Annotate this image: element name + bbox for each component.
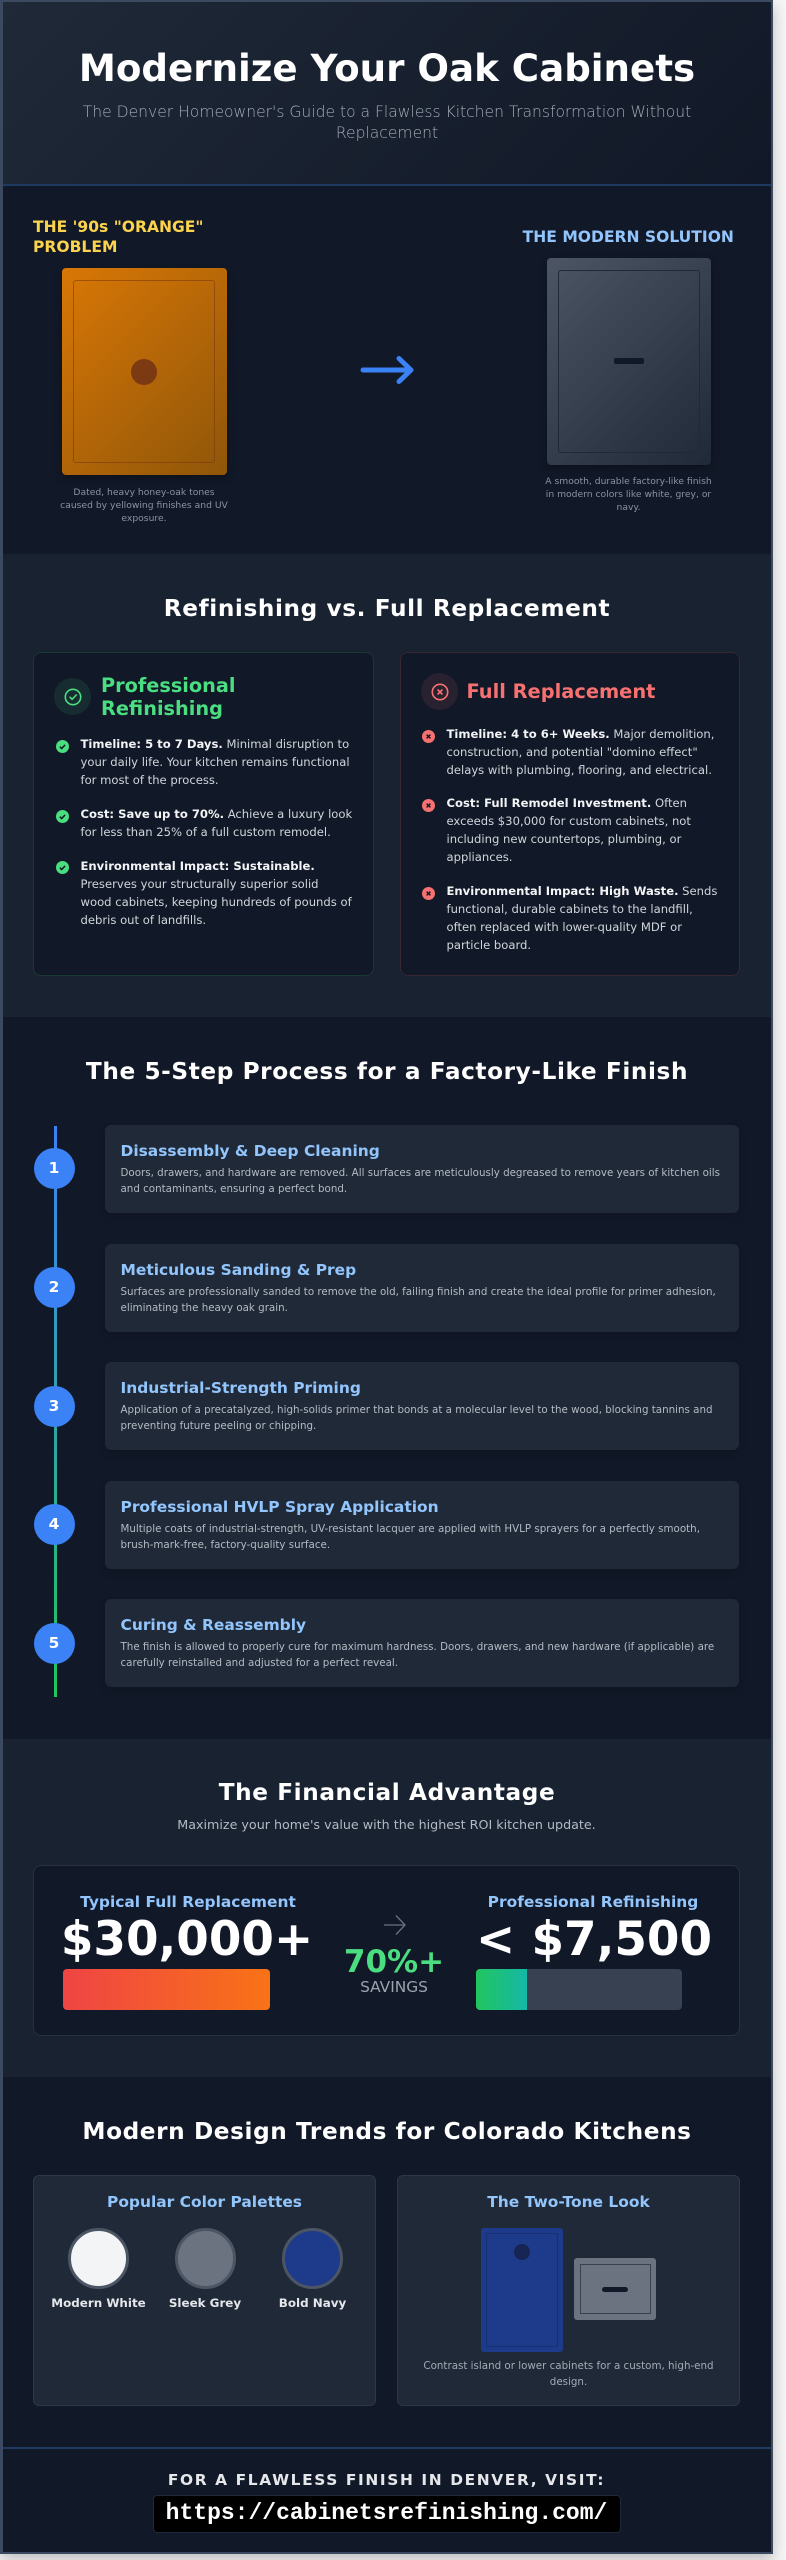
step 5 card <box>105 1599 739 1687</box>
problem caption: Dated, heavy honey-oak tones <box>73 487 215 498</box>
website url <box>152 2495 620 2533</box>
step 5 card: Curing & Reassembly <box>120 1616 306 1634</box>
refinishing heading: Professional <box>101 674 236 697</box>
cost text: appliances. <box>446 850 512 864</box>
icon: modern cabinet door <box>546 258 711 465</box>
swatch: grey <box>174 2228 236 2289</box>
step 1 number: 1 <box>49 1159 59 1177</box>
subtitle: Replacement <box>336 124 438 142</box>
cost text: Cost: Full Remodel Investment. Often <box>446 796 687 810</box>
solution caption: A smooth, durable factory-like finish <box>545 476 712 487</box>
step 2 number <box>34 1267 74 1308</box>
step 5 card: carefully reinstalled and adjusted for a perfect reveal. <box>120 1656 398 1668</box>
replacement bar <box>63 1969 270 2010</box>
step 1 card <box>105 1125 739 1213</box>
financial subtitle: Maximize your home's value with the highest ROI kitchen update. <box>177 1817 596 1832</box>
timeline text: Timeline: 5 to 7 Days. Minimal disruption to <box>80 737 349 751</box>
step 2 card <box>105 1244 739 1332</box>
environmental text: particle board. <box>446 938 531 952</box>
step 3 card <box>105 1362 739 1450</box>
cost comparison card <box>33 1865 740 2036</box>
environmental text: Environmental Impact: Sustainable. <box>80 859 315 873</box>
step 3 number: 3 <box>49 1397 59 1415</box>
panel: full replacement <box>400 652 740 976</box>
icon: x circle <box>421 673 458 710</box>
icon: bullet x <box>422 799 435 812</box>
solution caption <box>545 476 712 513</box>
icon: grey drawer <box>574 2258 656 2320</box>
swatch: white <box>68 2228 129 2289</box>
step 5 number: 5 <box>49 1634 59 1652</box>
environmental text <box>446 884 717 952</box>
step 4 card <box>105 1481 739 1569</box>
replacement label: Typical Full Replacement <box>80 1893 296 1911</box>
solution caption: in modern colors like white, grey, or <box>546 489 711 500</box>
panel: professional refinishing <box>33 652 374 976</box>
refinishing label: Professional Refinishing <box>488 1893 698 1911</box>
panel: design trends <box>3 2077 771 2448</box>
step 5 number <box>34 1623 74 1664</box>
step 4 number: 4 <box>49 1515 59 1533</box>
timeline text <box>446 727 714 777</box>
palettes heading: Popular Color Palettes <box>107 2193 302 2211</box>
cost text: Cost: Save up to 70%. Achieve a luxury look <box>80 807 352 821</box>
website url: https://cabinetsrefinishing.com/ <box>166 2500 607 2526</box>
step 3 card: preventing future peeling or chipping. <box>120 1420 316 1432</box>
step 4 card: brush-mark-free, factory-quality surface. <box>120 1538 330 1550</box>
environmental text: wood cabinets, keeping hundreds of pounds of <box>80 895 352 909</box>
title: Modernize Your Oak Cabinets <box>79 46 695 90</box>
subtitle <box>83 103 691 142</box>
step 4 card: Professional HVLP Spray Application <box>120 1498 439 1516</box>
swatch label: Bold Navy <box>279 2296 346 2310</box>
step 1 card: Doors, drawers, and hardware are removed. All surfaces are meticulously degreased to remove years of kitchen oils <box>120 1167 720 1179</box>
comparison heading: Refinishing vs. Full Replacement <box>164 594 610 622</box>
header panel <box>3 2 771 186</box>
step 1 number <box>34 1148 74 1189</box>
panel: financial advantage <box>3 1739 771 2077</box>
icon: bullet check <box>56 740 69 753</box>
step 3 card: Application of a precatalyzed, high-solids primer that bonds at a molecular level to the wood, blocking tannins and <box>120 1404 713 1416</box>
step 2 card: Meticulous Sanding & Prep <box>120 1261 356 1279</box>
environmental text: Environmental Impact: High Waste. Sends <box>446 884 717 898</box>
cost text: for less than 25% of a full custom remodel. <box>80 825 331 839</box>
step 2 card: Surfaces are professionally sanded to remove the old, failing finish and create the ideal profile for primer adhesion, <box>120 1286 716 1298</box>
refinishing bar <box>476 1969 682 2010</box>
panel: refinishing vs replacement <box>3 554 771 1017</box>
cost text <box>446 796 691 864</box>
step 1 card: and contaminants, ensuring a perfect bond. <box>120 1182 347 1194</box>
refinishing heading: Refinishing <box>101 697 223 720</box>
subtitle: The Denver Homeowner's Guide to a Flawless Kitchen Transformation Without <box>83 103 691 121</box>
footer panel <box>3 2447 771 2552</box>
timeline text: your daily life. Your kitchen remains functional <box>80 755 350 769</box>
step 3 card: Industrial-Strength Priming <box>120 1379 361 1397</box>
timeline line <box>54 1126 56 1697</box>
icon: check circle <box>54 678 91 715</box>
solution heading: THE MODERN SOLUTION <box>523 228 734 246</box>
footer call to action: FOR A FLAWLESS FINISH IN DENVER, VISIT: <box>168 2471 605 2489</box>
solution caption: navy. <box>617 502 640 513</box>
step 2 number: 2 <box>49 1278 59 1296</box>
cost text: exceeds $30,000 for custom cabinets, not <box>446 814 691 828</box>
panel: two-tone look <box>397 2175 740 2406</box>
timeline text: delays with plumbing, flooring, and electrical. <box>446 763 712 777</box>
savings percent: 70%+ <box>344 1944 444 1980</box>
environmental text: debris out of landfills. <box>80 913 206 927</box>
timeline text <box>80 737 350 787</box>
step 3 number <box>34 1386 74 1427</box>
problem heading: THE '90s "ORANGE" PROBLEM <box>33 218 204 256</box>
icon: oak cabinet door <box>62 268 226 475</box>
refinishing heading <box>101 674 236 720</box>
replacement price: $30,000+ <box>61 1913 313 1967</box>
savings label: SAVINGS <box>360 1978 428 1996</box>
timeline text: for most of the process. <box>80 773 219 787</box>
financial heading: The Financial Advantage <box>219 1778 555 1806</box>
icon: bullet check <box>56 810 69 823</box>
timeline text: Timeline: 4 to 6+ Weeks. Major demolition, <box>446 727 714 741</box>
icon: navy tall cabinet <box>481 2228 563 2352</box>
environmental text: functional, durable cabinets to the landfill, <box>446 902 693 916</box>
swatch label: Modern White <box>51 2296 146 2310</box>
timeline text: construction, and potential "domino effect" <box>446 745 698 759</box>
trends heading: Modern Design Trends for Colorado Kitchens <box>82 2118 692 2144</box>
environmental text: Preserves your structurally superior solid <box>80 877 319 891</box>
problem caption <box>60 487 228 524</box>
icon: bullet check <box>56 861 69 874</box>
two-tone caption: Contrast island or lower cabinets for a custom, high-end design. <box>423 2360 714 2388</box>
step 4 card: Multiple coats of industrial-strength, UV-resistant lacquer are applied with HVLP sprayers for a perfectly smooth, <box>120 1523 700 1535</box>
problem caption: exposure. <box>121 513 167 524</box>
panel: five step process <box>3 1017 771 1739</box>
swatch: navy <box>282 2228 343 2289</box>
refinishing price: < $7,500 <box>476 1913 712 1967</box>
arrow: savings <box>384 1915 406 1935</box>
process heading: The 5-Step Process for a Factory-Like Finish <box>86 1058 688 1084</box>
step 5 card: The finish is allowed to properly cure for maximum hardness. Doors, drawers, and new hardware (if applicable) are <box>120 1641 714 1653</box>
step 1 card: Disassembly & Deep Cleaning <box>120 1142 380 1160</box>
cost text <box>80 807 352 839</box>
two-tone heading: The Two-Tone Look <box>487 2193 650 2211</box>
icon: bullet x <box>422 730 435 743</box>
swatch label: Sleek Grey <box>169 2296 241 2310</box>
panel: color palettes <box>33 2175 376 2406</box>
arrow: transformation <box>360 356 414 384</box>
cost text: including new countertops, plumbing, or <box>446 832 681 846</box>
step 4 number <box>34 1504 74 1545</box>
icon: bullet x <box>422 887 435 900</box>
panel: problem and solution <box>3 186 771 554</box>
problem caption: caused by yellowing finishes and UV <box>60 500 228 511</box>
environmental text <box>80 859 352 927</box>
step 2 card: eliminating the heavy oak grain. <box>120 1302 288 1314</box>
replacement heading: Full Replacement <box>466 680 655 703</box>
environmental text: often replaced with lower-quality MDF or <box>446 920 682 934</box>
